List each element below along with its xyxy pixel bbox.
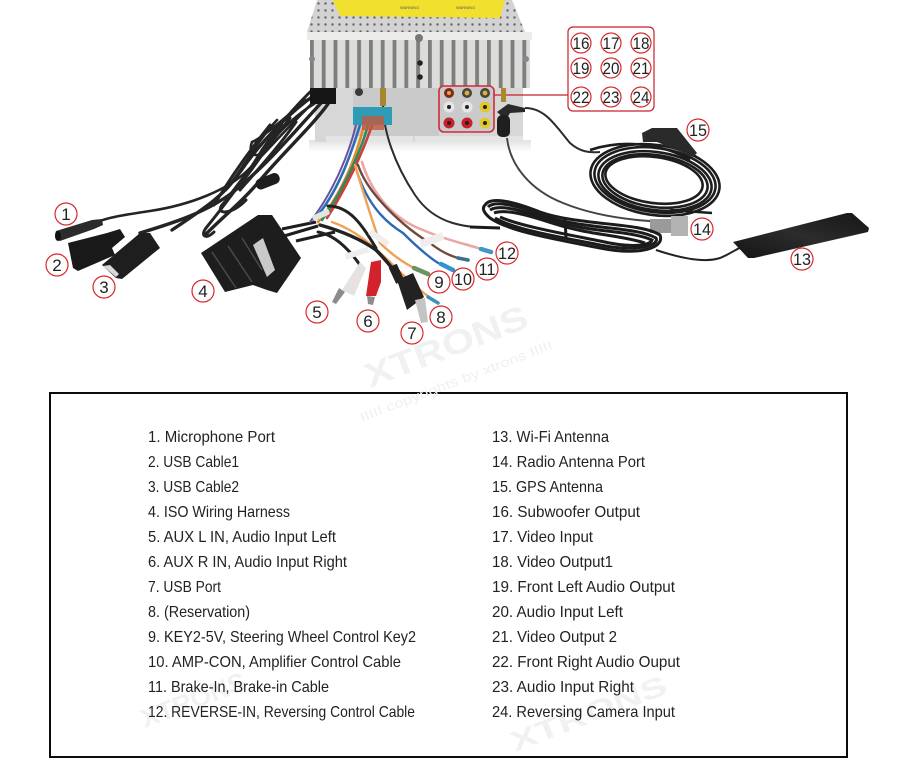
number callouts	[46, 119, 813, 344]
panel: legend	[50, 393, 847, 758]
callout 2	[46, 254, 68, 276]
RCA number key panel	[568, 27, 654, 111]
watermark: legend: XTRONS	[506, 670, 671, 758]
cable: radio lead	[507, 138, 650, 221]
legend right column: 20. Audio Input Left	[492, 604, 624, 621]
legend right column: 24. Reversing Camera Input	[492, 704, 676, 721]
callout 8: 8	[436, 308, 446, 327]
legend right column: 15. GPS Antenna	[492, 479, 603, 496]
callout 7: 7	[407, 324, 417, 343]
connector: USB cable 2	[102, 233, 160, 279]
legend left column: 3. USB Cable2	[148, 479, 239, 496]
black audio wires	[328, 206, 376, 248]
right-angle plugs on device	[497, 88, 525, 137]
GPS antenna cable coil	[586, 136, 724, 224]
device heat-sink fins	[310, 40, 530, 88]
callout 11: 11	[478, 260, 496, 279]
ISO label	[253, 238, 275, 277]
legend left column: 2. USB Cable1	[148, 454, 239, 471]
legend left column: 1. Microphone Port	[148, 429, 276, 446]
Wi-Fi antenna	[733, 213, 869, 258]
watermark: upper: XTRONS	[359, 298, 533, 395]
callout 1: 1	[61, 205, 71, 224]
radio antenna cable coil	[470, 201, 661, 251]
callout 9	[428, 271, 450, 293]
callout 18: 18	[632, 34, 650, 53]
legend right column: 18. Video Output1	[492, 554, 613, 571]
callout 17: 17	[602, 34, 620, 53]
black cable bundle to left	[100, 88, 336, 236]
callout 9: 9	[434, 273, 444, 292]
legend left column: 5. AUX L IN, Audio Input Left	[148, 529, 337, 546]
callout 6	[357, 310, 379, 332]
legend right column: 14. Radio Antenna Port	[492, 454, 646, 471]
connector: AUX R red RCA	[366, 260, 381, 305]
callout 2: 2	[52, 256, 62, 275]
radio antenna plug	[650, 216, 688, 236]
wire 10: amp-con blue	[357, 172, 442, 265]
harness block on device	[353, 88, 392, 130]
legend left column: 9. KEY2-5V, Steering Wheel Control Key2	[148, 629, 416, 646]
callout 15: 15	[689, 121, 707, 140]
legend left column: 12. REVERSE-IN, Reversing Control Cable	[148, 704, 415, 721]
legend left column: 11. Brake-In, Brake-in Cable	[148, 679, 329, 696]
callout 13: 13	[793, 250, 811, 269]
GPS antenna puck	[642, 128, 697, 157]
watermark: upper: IIIII copyrights by xtrons IIIII	[358, 337, 554, 425]
legend right column: 21. Video Output 2	[492, 629, 617, 646]
callout 12: 12	[498, 244, 516, 263]
callout 20: 20	[602, 59, 620, 78]
connector: ISO wiring harness	[201, 215, 335, 293]
RCA socket panel	[439, 86, 494, 132]
cable: GPS lead	[525, 108, 600, 152]
legend left column: 8. (Reservation)	[148, 604, 250, 621]
wire 9: key2 orange	[355, 165, 414, 268]
watermark: legend: XTRONS	[136, 666, 250, 734]
callout 5	[306, 301, 328, 323]
connector: USB cable 1	[68, 229, 125, 271]
callout 11	[476, 258, 498, 280]
legend left column: 6. AUX R IN, Audio Input Right	[148, 554, 348, 571]
callout 1	[55, 203, 77, 225]
callout 3	[93, 276, 115, 298]
callout 8	[430, 306, 452, 328]
device top plate	[307, 0, 525, 32]
legend right column: 13. Wi-Fi Antenna	[492, 429, 609, 446]
legend right column: 16. Subwoofer Output	[492, 504, 641, 521]
callout 4	[192, 280, 214, 302]
device: head unit rear	[307, 0, 532, 152]
connector: AUX L white RCA	[332, 262, 366, 304]
small white wire tags	[345, 229, 445, 260]
callout 5: 5	[312, 303, 322, 322]
callout 24: 24	[632, 88, 650, 107]
legend right column	[492, 429, 681, 721]
wire 8: reservation	[332, 222, 434, 300]
legend left column	[148, 429, 416, 721]
callout 14: 14	[693, 220, 711, 239]
device yellow warning label	[333, 0, 505, 18]
callout 4: 4	[198, 282, 208, 301]
callout 21: 21	[632, 59, 650, 78]
watermark: legend	[136, 666, 671, 758]
wire 12: reverse-in pink	[362, 162, 481, 249]
callout 10: 10	[454, 270, 472, 289]
wire 11: brake-in brown	[358, 165, 458, 258]
callout 3: 3	[99, 278, 109, 297]
callout 7	[401, 322, 423, 344]
watermark: upper	[358, 298, 554, 425]
callout 19: 19	[572, 59, 590, 78]
legend right column: 17. Video Input	[492, 529, 594, 546]
callout 6: 6	[363, 312, 373, 331]
device yellow warning label: WARNING	[456, 5, 475, 10]
coloured wire bundle	[310, 125, 491, 303]
legend right column: 22. Front Right Audio Ouput	[492, 654, 681, 671]
connector: microphone jack	[55, 219, 103, 241]
red connector line	[494, 94, 568, 96]
Wi-Fi antenna cable	[656, 247, 742, 260]
connector: USB port	[389, 264, 428, 323]
legend right column: 23. Audio Input Right	[492, 679, 635, 696]
callout 16: 16	[572, 34, 590, 53]
callout 22: 22	[572, 88, 590, 107]
cable: aerial cable	[383, 100, 500, 228]
legend left column: 7. USB Port	[148, 579, 221, 596]
callout 23: 23	[602, 88, 620, 107]
legend left column: 4. ISO Wiring Harness	[148, 504, 290, 521]
legend right column: 19. Front Left Audio Output	[492, 579, 676, 596]
legend left column: 10. AMP-CON, Amplifier Control Cable	[148, 654, 401, 671]
device yellow warning label: WARNING	[400, 5, 419, 10]
